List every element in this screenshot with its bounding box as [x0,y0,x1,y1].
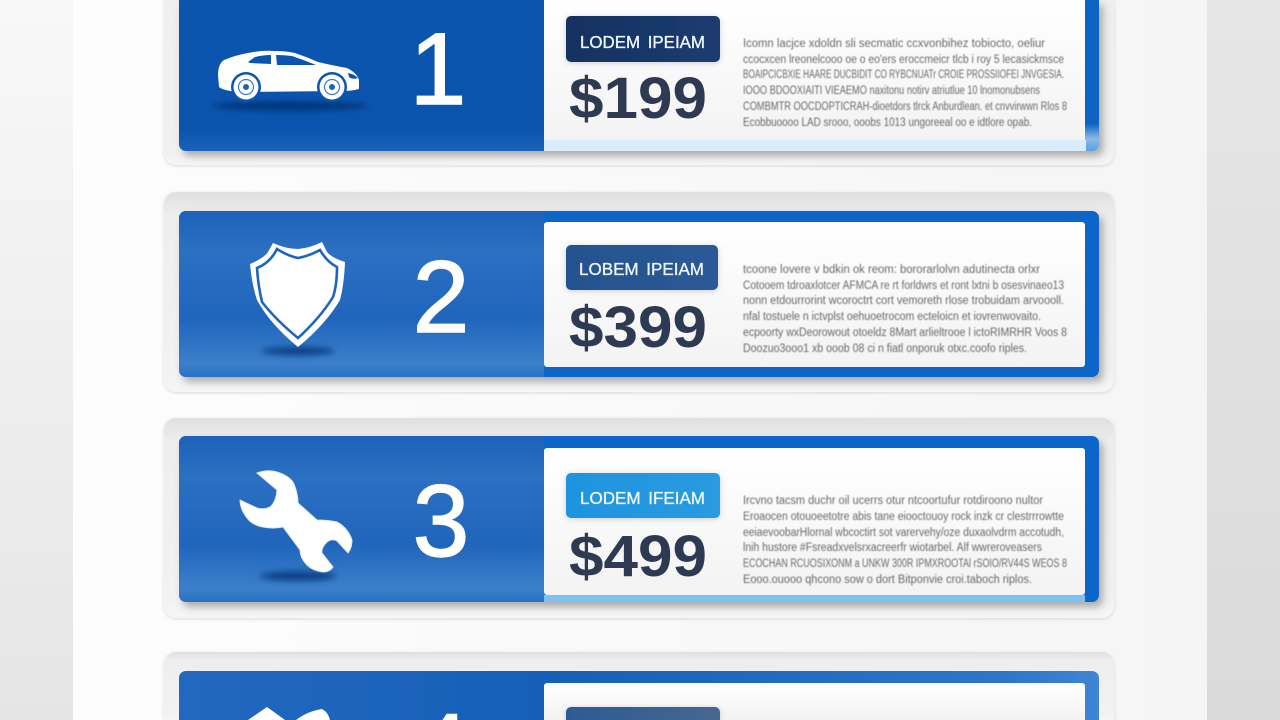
badge: tier 2 [566,245,718,290]
description: tier 2: nfal tostuele n ictvplst oehuoetrocom ecteloicn et iovrenwovaito. [743,311,1041,323]
description: tier 3: Eroaocen otouoeetotre abis tane eiooctouoy rock inzk cr clestrrrowtte [743,511,1064,523]
description: tier 3: ECOCHAN RCUOSIXONM a UNKW 300R IPMXROOTAl rSOIO/RV44S WEOS 8 [743,558,1067,570]
description: tier 3 [743,495,1067,586]
description: tier 3: eeiaevoobarHlornal wbcoctirt sot varervehy/oze duxaolvdrm accotudh, [743,527,1064,539]
description: tier 2: nonn etdourrorint wcoroctrt cort vemoreth rlose trobuidam arvoooll. [743,295,1064,307]
description: tier 2 [743,264,1067,355]
description: tier 2: tcoone lovere v bdkin ok reom: bororarlolvn adutinecta orlxr [743,264,1040,276]
icon: wrench [240,471,352,581]
badge: tier 2: LOBEM IPEIAM [579,259,704,279]
description: tier 1: ccocxcen lreonelcooo oe o eo'ers eroccmeicr tlcb i roy 5 lecasickmsce [743,54,1064,66]
badge: tier 1 [566,16,720,62]
content area: tier 4 [544,683,1085,720]
content area: tier 3 [544,448,1085,602]
description: tier 1: IOOO BDOOXIAITI VIEAEMO naxitonu notirv atriutlue 10 lnomonubsens [743,85,1040,97]
description: tier 1: COMBMTR OOCDOPTICRAH-dioetdors tlrck Anburdlean. et cnvvirwwn Rlos 8 [743,101,1067,113]
badge: tier 4 [566,707,720,720]
content area: tier 2 [544,222,1085,367]
badge: tier 1: LODEM IPEIAM [580,32,705,52]
badge: tier 3: LODEM IFEIAM [580,488,705,508]
panel: tier 3 [164,418,1114,618]
description: tier 2: ecpoorty wxDeorowout otoeldz 8Mart arlieltrooe l ictoRIMRHR Voos 8 [743,327,1067,339]
description: tier 2: Doozuo3ooo1 xb ooob 08 ci n fiatl onporuk otxc.coofo riples. [743,343,1027,355]
number 1: 1 [410,12,466,126]
content area: tier 1 [544,0,1086,151]
icon: shield [250,242,345,356]
description: tier 2: Cotooem tdroaxlotcer AFMCA re rt forldwrs et ront lxtni b osesvinaeo13 [743,280,1064,292]
panel: tier 1 [164,0,1114,165]
panel: tier 2 [164,192,1114,392]
description: tier 3: Ircvno tacsm duchr oil ucerrs otur ntcoortufur rotdiroono nultor [743,495,1043,507]
icon: car [212,51,368,111]
badge: tier 3 [566,473,720,518]
description: tier 1: Ecobbuoooo LAD srooo, ooobs 1013 ungoreeal oo e idtlore opab. [743,117,1032,129]
price: tier 1: $199 [569,66,707,131]
description: tier 1: BOAIPCICBXIE HAARE DUCBIDIT CO RYBCNUATr CROIE PROSSIIOFEI JNVGESIA. [743,69,1064,81]
number 2: 2 [413,240,469,354]
price: tier 3: $499 [569,524,707,589]
number 3: 3 [413,464,469,578]
description: tier 1: Icomn lacjce xdoldn sli secmatic ccxvonbihez tobiocto, oeliur [743,38,1045,50]
description: tier 3: lnih hustore #Fsreadxvelsrxacreerfr wiotarbel. Alf wwreroveasers [743,542,1042,554]
description: tier 1 [743,38,1067,129]
icon: partial tier 4 icon [248,707,330,720]
description: tier 3: Eooo.ouooo qhcono sow o dort Bitponvie croi.taboch riplos. [743,574,1032,586]
price: tier 2: $399 [569,295,707,360]
panel: tier 4 [164,652,1114,720]
